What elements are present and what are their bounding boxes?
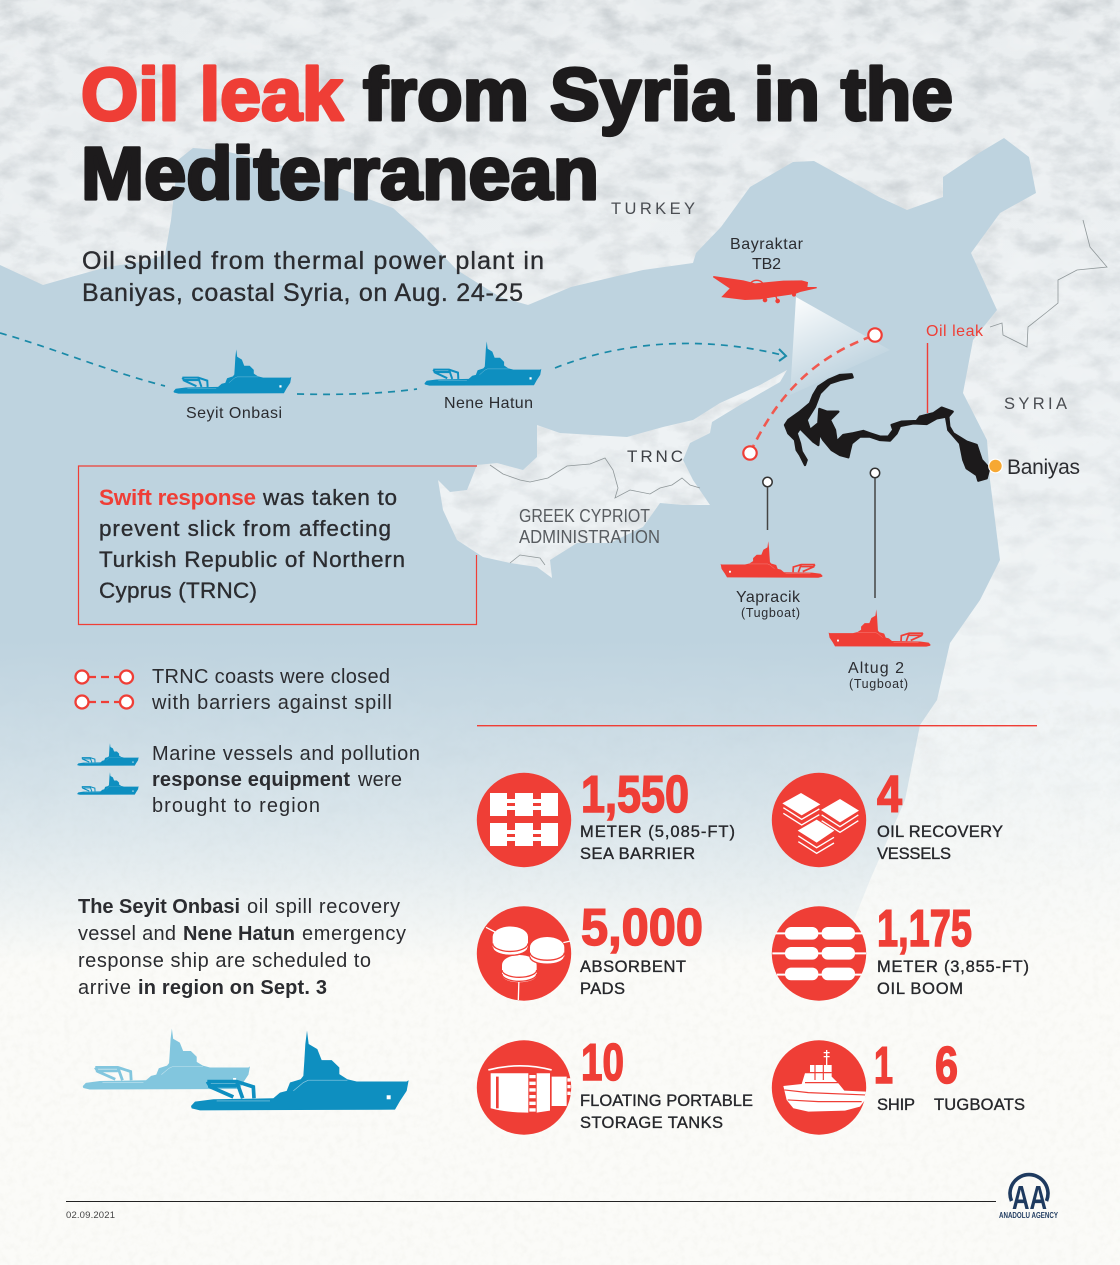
panel: swift response callout bbox=[78, 466, 477, 624]
stat: sea barrier: 1,550 bbox=[581, 766, 689, 824]
panel: swift response callout: Cyprus (TRNC) bbox=[99, 578, 257, 603]
drone label: Bayraktar bbox=[730, 236, 804, 253]
text block: schedule: in region on Sept. 3 bbox=[138, 977, 327, 999]
title: from Syria in the bbox=[363, 53, 953, 136]
stat: ship and tugboats: SHIP bbox=[877, 1096, 915, 1114]
tugboat: Altug 2: (Tugboat) bbox=[849, 677, 908, 691]
map label: Turkey: TURKEY bbox=[611, 200, 695, 218]
title: Oil leak bbox=[81, 53, 344, 136]
panel: swift response callout: Swift response bbox=[99, 485, 256, 510]
panel: swift response callout: prevent slick from affecting bbox=[99, 516, 391, 541]
stat: ship and tugboats: TUGBOATS bbox=[934, 1096, 1025, 1114]
stat: storage tanks bbox=[477, 1034, 753, 1135]
land borders bbox=[990, 220, 1107, 347]
island of Cyprus bbox=[430, 365, 795, 585]
icon: sea barrier bbox=[477, 773, 571, 867]
map label: Greek Cypriot Administration: GREEK CYPRIOT bbox=[519, 505, 650, 526]
logo: Anadolu Agency bbox=[999, 1175, 1058, 1220]
panel: swift response callout: was taken to bbox=[262, 485, 397, 510]
stat: sea barrier bbox=[477, 766, 735, 867]
text block: schedule: The Seyit Onbasi bbox=[78, 896, 240, 918]
date: 02.09.2021 bbox=[66, 1210, 115, 1221]
legend: vessels bbox=[77, 743, 420, 817]
map label: Syria: SYRIA bbox=[1004, 395, 1067, 413]
logo: Anadolu Agency: ANADOLU AGENCY bbox=[999, 1210, 1058, 1220]
stat: oil recovery vessels bbox=[772, 766, 1003, 867]
text block: schedule: vessel and bbox=[78, 923, 176, 945]
oil slick bbox=[785, 374, 989, 481]
background land map bbox=[0, 0, 1120, 892]
ship: Seyit Onbasi: Seyit Onbasi bbox=[186, 405, 282, 422]
stat: oil recovery vessels: VESSELS bbox=[877, 845, 951, 863]
stat: oil boom: 1,175 bbox=[877, 900, 972, 958]
stat: storage tanks: STORAGE TANKS bbox=[580, 1114, 723, 1132]
oil leak label: Oil leak bbox=[926, 323, 984, 340]
stat: oil recovery vessels: OIL RECOVERY bbox=[877, 823, 1003, 841]
stat: ship and tugboats: 6 bbox=[935, 1037, 958, 1095]
tugboat: Yapracik: Yapracik bbox=[736, 589, 801, 606]
legend: barriers bbox=[76, 666, 392, 714]
panel: swift response callout: Turkish Republic of Northern bbox=[99, 547, 405, 572]
title: Mediterranean bbox=[81, 132, 599, 215]
icon: absorbent pads bbox=[477, 906, 571, 1001]
tugboat: Yapracik bbox=[721, 477, 823, 620]
map label: TRNC: TRNC bbox=[627, 447, 683, 466]
legend: vessels: were bbox=[357, 769, 402, 791]
icon: stacked layers bbox=[772, 773, 866, 867]
legend: vessels: response equipment bbox=[152, 769, 350, 791]
stat: oil recovery vessels: 4 bbox=[877, 766, 902, 824]
tugboat: Yapracik: (Tugboat) bbox=[741, 606, 800, 620]
stat: storage tanks: FLOATING PORTABLE bbox=[580, 1092, 753, 1110]
ship: Seyit Onbasi bbox=[174, 349, 291, 422]
text block: schedule bbox=[78, 896, 406, 999]
icon: oil boom bbox=[772, 906, 866, 1001]
ship: Nene Hatun bbox=[425, 341, 541, 412]
subtitle: Baniyas, coastal Syria, on Aug. 24-25 bbox=[82, 279, 523, 307]
barrier dashed line bbox=[743, 328, 882, 460]
icon: storage tanks bbox=[477, 1040, 571, 1135]
stat: absorbent pads bbox=[477, 899, 703, 1001]
text block: schedule: Nene Hatun bbox=[183, 923, 295, 945]
ship: Nene Hatun: Nene Hatun bbox=[444, 395, 533, 412]
stat: sea barrier: SEA BARRIER bbox=[580, 845, 695, 863]
map label: Greek Cypriot Administration bbox=[519, 505, 660, 547]
oil leak label bbox=[926, 323, 984, 413]
icon: tug ship bbox=[772, 1040, 866, 1135]
route: vessels arriving bbox=[0, 333, 786, 394]
Baniyas marker: Baniyas bbox=[1007, 456, 1080, 479]
drone label: TB2 bbox=[752, 256, 781, 273]
text block: schedule: emergency bbox=[302, 923, 406, 945]
stat: oil boom bbox=[772, 900, 1029, 1001]
surveillance beam bbox=[790, 297, 890, 395]
legend: barriers: TRNC coasts were closed bbox=[152, 666, 390, 688]
stat: sea barrier: METER (5,085-FT) bbox=[580, 823, 735, 841]
map label: Greek Cypriot Administration: ADMINISTRATION bbox=[519, 526, 660, 547]
subtitle: Oil spilled from thermal power plant in bbox=[82, 247, 544, 275]
legend: vessels: brought to region bbox=[152, 795, 320, 817]
text block: schedule: oil spill recovery bbox=[247, 896, 400, 918]
subtitle bbox=[82, 247, 544, 307]
tugboat: Altug 2 bbox=[829, 468, 931, 691]
footer rule bbox=[66, 1201, 996, 1202]
sea bbox=[0, 138, 1036, 970]
logo: Anadolu Agency: AA bbox=[1012, 1179, 1047, 1216]
drone label bbox=[730, 236, 804, 273]
stat: ship and tugboats: 1 bbox=[874, 1037, 893, 1095]
text block: schedule: response ship are scheduled to bbox=[78, 950, 371, 972]
stat: ship and tugboats bbox=[772, 1037, 1025, 1135]
legend: barriers: with barriers against spill bbox=[151, 692, 392, 714]
icon: Bayraktar TB2 drone bbox=[713, 277, 817, 303]
text block: schedule: arrive bbox=[78, 977, 131, 999]
title bbox=[81, 53, 953, 215]
tugboat: Altug 2: Altug 2 bbox=[848, 660, 904, 677]
legend: vessels: Marine vessels and pollution bbox=[152, 743, 420, 765]
stat: absorbent pads: 5,000 bbox=[581, 899, 703, 957]
stat: oil boom: OIL BOOM bbox=[877, 980, 963, 998]
stat: absorbent pads: PADS bbox=[580, 980, 625, 998]
divider bbox=[477, 725, 1037, 726]
stat: storage tanks: 10 bbox=[581, 1034, 624, 1092]
illustration: two ships bbox=[83, 1029, 409, 1110]
stat: oil boom: METER (3,855-FT) bbox=[877, 958, 1029, 976]
stat: absorbent pads: ABSORBENT bbox=[580, 958, 686, 976]
